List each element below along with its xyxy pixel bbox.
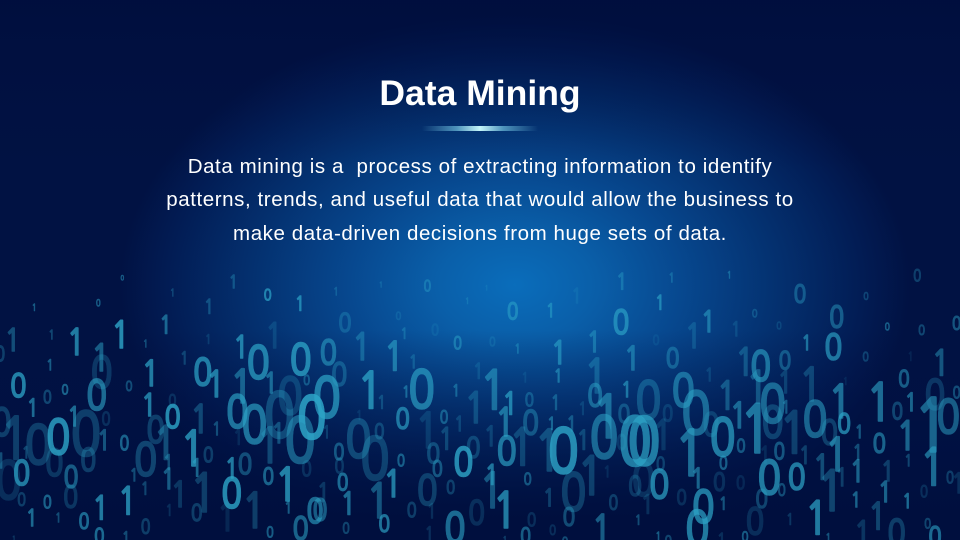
binary digit rain: 1	[275, 463, 299, 509]
binary digit rain: 1	[684, 319, 702, 354]
binary digit rain: 1	[190, 400, 210, 440]
binary digit rain: 0	[306, 494, 324, 529]
binary digit rain: 1	[912, 392, 951, 464]
binary digit rain: 1	[616, 271, 627, 294]
binary digit rain: 0	[432, 460, 443, 481]
binary digit rain: 1	[716, 377, 737, 416]
binary digit rain: 0	[787, 461, 806, 496]
binary digit rain: 1	[866, 379, 893, 430]
binary digit rain: 0	[226, 391, 249, 436]
binary digit rain: 0	[891, 402, 903, 424]
binary digit rain: 0	[616, 433, 627, 453]
binary digit rain: 1	[224, 455, 239, 483]
binary digit rain: 1	[26, 397, 39, 421]
binary digit rain: 0	[78, 512, 90, 533]
binary digit rain: 0	[374, 422, 385, 442]
binary digit rain: 1	[495, 403, 515, 443]
binary digit rain: 0	[652, 333, 660, 347]
binary digit rain: 0	[628, 473, 642, 501]
binary digit rain: 0	[761, 402, 784, 446]
binary digit rain: 1	[206, 367, 225, 404]
binary digit rain: 0	[453, 442, 474, 483]
binary digit rain: 0	[90, 352, 113, 396]
binary digit rain: 0	[656, 455, 666, 474]
binary digit rain: 0	[918, 323, 925, 337]
binary digit rain: 1	[4, 326, 21, 357]
binary digit rain: 0	[759, 379, 787, 432]
binary digit rain: 1	[241, 488, 267, 536]
binary digit rain: 0	[439, 409, 449, 427]
binary digit rain: 1	[635, 513, 642, 527]
binary digit rain: 1	[551, 394, 561, 413]
binary digit rain: 0	[426, 440, 441, 468]
binary digit rain: 1	[690, 465, 705, 493]
binary digit rain: 0	[755, 487, 768, 513]
binary digit rain: 0	[360, 431, 390, 490]
binary digit rain: 0	[221, 473, 243, 515]
binary digit rain: 1	[384, 338, 404, 377]
binary digit rain: 1	[828, 380, 852, 426]
binary digit rain: 1	[547, 416, 556, 433]
binary digit rain: 0	[301, 460, 312, 480]
binary digit rain: 1	[854, 422, 864, 442]
binary digit rain: 0	[524, 391, 534, 410]
binary digit rain: 1	[904, 390, 918, 416]
binary digit rain: 0	[63, 484, 79, 514]
binary digit rain: 1	[577, 452, 605, 504]
binary digit rain: 1	[322, 424, 331, 442]
binary digit rain: 1	[492, 487, 518, 536]
binary digit rain: 0	[121, 275, 124, 282]
binary digit rain: 0	[898, 369, 910, 392]
binary digit rain: 1	[427, 502, 437, 522]
binary digit rain: 1	[228, 272, 238, 292]
binary digit rain: 1	[366, 478, 391, 526]
binary digit rain: 1	[578, 401, 587, 418]
binary digit rain: 1	[379, 282, 383, 289]
binary digit rain: 0	[736, 473, 746, 493]
binary digit rain: 0	[337, 473, 349, 495]
binary digit rain: 1	[117, 484, 137, 521]
binary digit rain: 1	[295, 294, 305, 314]
binary digit rain: 1	[233, 333, 249, 364]
binary digit rain: 1	[835, 465, 848, 491]
binary digit rain: 1	[904, 454, 913, 470]
binary digit rain: 1	[473, 362, 484, 383]
binary digit rain: 1	[165, 504, 173, 519]
binary digit rain: 0	[802, 396, 828, 445]
binary digit rain: 0	[312, 370, 342, 427]
binary digit rain: 0	[820, 416, 838, 450]
binary digit rain: 1	[91, 342, 110, 378]
binary digit rain: 0	[61, 383, 69, 396]
binary digit rain: 0	[617, 411, 653, 477]
binary digit rain: 1	[554, 367, 563, 386]
binary digit rain: 1	[180, 350, 189, 368]
binary digit rain: 1	[180, 426, 205, 474]
binary digit rain: 0	[45, 447, 64, 483]
binary digit rain: 1	[479, 468, 504, 516]
binary digit rain: 1	[438, 425, 454, 455]
binary digit rain: 1	[55, 512, 62, 524]
binary digit rain: 0	[507, 302, 519, 324]
binary digit rain: 1	[731, 320, 741, 340]
binary digit rain: 0	[522, 406, 540, 440]
binary digit rain: 1	[586, 329, 602, 358]
binary digit rain: 1	[550, 336, 568, 370]
binary digit rain: 0	[431, 323, 439, 339]
binary digit rain: 1	[357, 367, 383, 418]
binary digit rain: 0	[750, 346, 772, 388]
binary digit rain: 1	[813, 451, 831, 485]
binary digit rain: 1	[153, 421, 177, 468]
binary digit rain: 1	[26, 508, 38, 531]
binary digit rain: 1	[204, 298, 214, 317]
binary digit rain: 1	[485, 285, 488, 292]
binary digit rain: 0	[885, 322, 890, 333]
binary digit rain: 0	[63, 464, 79, 494]
binary digit rain: 0	[560, 469, 587, 520]
binary digit rain: 0	[395, 310, 402, 322]
binary digit rain: 0	[468, 496, 486, 530]
binary digit rain: 0	[237, 451, 253, 480]
binary digit rain: 0	[549, 523, 556, 537]
binary digit rain: 0	[246, 341, 270, 387]
binary digit rain: 0	[423, 280, 431, 295]
binary digit rain: 1	[727, 271, 732, 280]
binary digit rain: 0	[333, 442, 345, 464]
binary digit rain: 1	[484, 461, 499, 489]
binary digit rain: 1	[189, 469, 217, 521]
binary digit rain: 0	[262, 467, 274, 489]
binary digit rain: 0	[793, 282, 807, 308]
binary digit rain: 0	[70, 405, 102, 466]
binary digit rain: 1	[263, 370, 278, 399]
binary digit rain: 1	[746, 367, 769, 411]
binary digit rain: 0	[338, 310, 352, 337]
binary digit rain: 1	[265, 319, 283, 354]
binary digit rain: 1	[652, 416, 673, 456]
binary digit rain: 0	[263, 288, 272, 304]
binary digit rain: 1	[479, 364, 508, 419]
binary digit rain: 1	[452, 384, 460, 400]
binary digit rain: 0	[446, 479, 455, 497]
binary digit rain: 1	[701, 308, 716, 338]
description text: Data mining is a process of extracting information to identify	[188, 155, 772, 178]
description text: patterns, trends, and useful data that would allow the business to	[166, 188, 794, 211]
binary digit rain: 1	[256, 423, 282, 471]
binary digit rain: 0	[702, 409, 720, 442]
binary digit rain: 1	[849, 458, 865, 488]
binary digit rain: 0	[164, 400, 181, 434]
binary digit rain: 0	[562, 505, 576, 531]
binary digit rain: 1	[402, 384, 410, 401]
binary digit rain: 1	[521, 371, 529, 385]
binary digit rain: 1	[576, 427, 590, 454]
binary digit rain: 0	[342, 522, 350, 537]
binary digit rain: 0	[589, 411, 619, 469]
binary digit rain: 1	[655, 294, 665, 313]
binary digit rain: 1	[284, 500, 293, 517]
binary digit rain: 0	[773, 442, 785, 464]
binary digit rain: 0	[829, 304, 845, 334]
binary digit rain: 0	[946, 470, 954, 487]
binary digit rain: 1	[233, 428, 244, 448]
binary digit rain: 0	[691, 486, 715, 531]
binary digit rain: 1	[143, 339, 148, 350]
binary digit rain: 0	[863, 291, 869, 302]
binary digit rain: 0	[752, 308, 758, 319]
binary digit rain: 1	[205, 333, 212, 346]
binary digit rain: 1	[592, 389, 623, 448]
binary digit rain: 1	[159, 313, 172, 338]
binary digit rain: 0	[713, 470, 726, 496]
binary digit rain: 1	[317, 480, 330, 506]
binary digit rain: 0	[24, 419, 53, 474]
binary digit rain: 1	[781, 399, 791, 417]
binary digit rain: 1	[908, 351, 914, 363]
binary digit rain: 1	[377, 394, 386, 412]
binary digit rain: 1	[161, 466, 176, 495]
binary digit rain: 1	[603, 464, 612, 481]
binary digit rain: 0	[862, 351, 869, 364]
binary digit rain: 0	[676, 488, 687, 508]
binary digit rain: 1	[508, 424, 535, 475]
binary digit rain: 1	[163, 453, 174, 473]
binary digit rain: 0	[608, 494, 618, 513]
binary digit rain: 1	[704, 366, 714, 385]
binary digit rain: 1	[514, 343, 521, 355]
binary digit rain: 0	[631, 458, 655, 504]
binary digit rain: 0	[43, 389, 52, 407]
binary digit rain: 0	[141, 518, 151, 537]
binary digit rain: 0	[736, 437, 746, 456]
binary digit rain: 1	[97, 427, 111, 455]
binary digit rain: 1	[454, 415, 465, 435]
binary digit rain: 1	[566, 415, 577, 435]
binary digit rain: 0	[416, 470, 438, 512]
binary digit rain: 1	[877, 479, 893, 508]
binary digit rain: 1	[0, 412, 30, 470]
binary digit rain: 0	[397, 454, 405, 470]
binary digit rain: 1	[533, 423, 563, 480]
binary digit rain: 1	[931, 347, 950, 382]
binary digit rain: 0	[303, 373, 310, 387]
binary digit rain: 0	[296, 390, 327, 449]
binary digit rain: 0	[395, 406, 410, 435]
binary digit rain: 1	[668, 272, 675, 285]
binary digit rain: 0	[920, 484, 928, 501]
binary digit rain: 0	[191, 503, 203, 526]
binary digit rain: 0	[408, 365, 436, 418]
binary digit rain: 0	[824, 331, 843, 366]
binary digit rain: 1	[852, 443, 863, 463]
binary digit rain: 1	[216, 498, 237, 538]
binary digit rain: 1	[778, 407, 808, 464]
binary digit rain: 1	[624, 343, 641, 376]
binary digit rain: 1	[465, 296, 470, 306]
binary digit rain: 1	[32, 303, 37, 313]
binary digit rain: 0	[523, 472, 532, 488]
binary digit rain: 1	[825, 433, 849, 479]
binary digit rain: 0	[80, 444, 97, 477]
binary digit rain: 0	[312, 497, 328, 527]
binary digit rain: 0	[757, 455, 782, 503]
binary digit rain: 1	[546, 302, 556, 321]
binary digit rain: 1	[48, 329, 55, 341]
binary digit rain: 1	[896, 416, 917, 457]
binary digit rain: 1	[777, 369, 793, 399]
binary digit rain: 1	[483, 423, 498, 451]
binary digit rain: 1	[230, 365, 254, 411]
binary digit rain: 1	[816, 464, 846, 520]
binary digit rain: 0	[101, 411, 111, 429]
binary digit rain: 0	[635, 376, 662, 428]
binary digit rain: 1	[415, 408, 440, 456]
binary digit rain: 1	[902, 491, 913, 512]
binary digit rain: 1	[170, 288, 175, 299]
binary digit rain: 0	[466, 435, 481, 464]
binary digit rain: 0	[627, 411, 661, 477]
binary digit rain: 1	[502, 389, 518, 420]
binary digit rain: 1	[851, 490, 861, 511]
binary digit rain: 0	[837, 410, 851, 438]
binary digit rain: 0	[665, 345, 680, 373]
binary digit rain: 0	[119, 435, 129, 454]
binary digit rain: 1	[801, 334, 812, 354]
binary digit rain: 0	[10, 370, 27, 403]
binary digit rain: 1	[212, 421, 221, 439]
binary digit rain: 1	[356, 409, 363, 422]
binary digit rain: 1	[621, 380, 632, 402]
binary digit rain: 0	[13, 457, 31, 491]
binary digit rain: 0	[289, 339, 312, 383]
binary digit rain: 0	[46, 414, 71, 463]
binary digit rain: 1	[759, 445, 771, 468]
binary digit rain: 0	[778, 349, 792, 374]
binary digit rain: 0	[406, 501, 417, 521]
binary digit rain: 1	[352, 331, 371, 367]
binary digit rain: 0	[134, 438, 158, 484]
binary digit rain: 1	[66, 326, 86, 362]
binary digit rain: 0	[489, 336, 496, 349]
binary digit rain: 0	[547, 421, 580, 484]
binary digit rain: 1	[67, 404, 81, 431]
binary digit rain: 1	[140, 481, 150, 498]
binary digit rain: 0	[284, 411, 316, 473]
binary digit rain: 0	[776, 321, 782, 331]
binary digit rain: 1	[919, 444, 946, 495]
title: Data Mining	[379, 73, 581, 113]
binary digit rain: 0	[872, 431, 886, 458]
binary digit rain: 1	[584, 354, 608, 401]
binary digit rain: 1	[92, 492, 109, 525]
binary digit rain: 1	[799, 363, 823, 409]
binary digit rain: 1	[340, 489, 357, 520]
binary digit rain: 0	[777, 483, 786, 499]
binary digit rain: 0	[662, 403, 673, 426]
binary digit rain: 1	[22, 445, 30, 462]
binary digit rain: 0	[719, 455, 728, 473]
binary digit rain: 0	[924, 375, 946, 416]
binary digit rain: 0	[649, 465, 670, 505]
binary digit rain: 1	[729, 399, 748, 435]
binary digit rain: 1	[868, 500, 887, 536]
binary digit rain: 0	[378, 513, 390, 537]
binary digit rain: 1	[400, 327, 408, 342]
binary digit rain: 0	[168, 394, 177, 410]
binary digit rain: 1	[543, 487, 555, 511]
binary digit rain: 0	[496, 431, 517, 472]
binary digit rain: 1	[640, 491, 654, 518]
binary digit rain: 1	[170, 478, 189, 514]
description text	[166, 155, 794, 245]
binary digit rain: 0	[319, 336, 337, 370]
binary digit rain: 0	[671, 369, 695, 415]
binary digit rain: 1	[141, 358, 160, 393]
description text: make data-driven decisions from huge sets of data.	[233, 222, 727, 245]
binary digit rain: 0	[527, 511, 537, 530]
binary digit rain: 0	[612, 305, 630, 340]
binary digit rain: 1	[843, 376, 848, 387]
binary digit rain: 1	[271, 420, 286, 448]
binary digit rain: 1	[735, 345, 755, 382]
binary digit rain: 1	[464, 388, 486, 431]
binary digit rain: 0	[241, 401, 268, 453]
binary digit rain: 1	[46, 359, 54, 374]
binary digit rain: 0	[680, 386, 712, 445]
binary digit rain: 1	[383, 467, 402, 504]
binary digit rain: 0	[277, 373, 303, 424]
binary digit rain: 0	[587, 382, 603, 413]
binary digit rain: 0	[331, 358, 348, 391]
binary digit rain: 0	[125, 379, 133, 393]
binary digit rain: 1	[190, 457, 203, 481]
binary digit rain: 0	[17, 492, 26, 509]
binary digit rain: 0	[86, 375, 108, 417]
binary digit rain: 1	[799, 445, 811, 468]
binary digit rain: 0	[709, 414, 736, 465]
binary digit rain: 1	[129, 468, 139, 485]
binary digit rain: 1	[719, 496, 728, 513]
binary digit rain: 1	[571, 286, 582, 307]
binary digit rain: 0	[43, 494, 52, 512]
binary digit rain: 1	[786, 513, 794, 528]
binary digit rain: 0	[913, 269, 922, 285]
binary digit rain: 1	[111, 318, 130, 355]
binary digit rain: 0	[924, 517, 931, 530]
binary digit rain: 1	[141, 391, 157, 422]
binary digit rain: 0	[345, 415, 372, 467]
binary digit rain: 0	[334, 457, 344, 477]
binary digit rain: 0	[203, 444, 214, 466]
binary digit rain: 0	[263, 386, 296, 448]
binary digit rain: 1	[333, 286, 339, 298]
binary digit rain: 1	[674, 424, 706, 486]
binary digit rain: 0	[96, 299, 101, 309]
binary digit rain: 0	[146, 413, 165, 450]
binary digit rain: 1	[739, 399, 773, 464]
binary digit rain: 1	[408, 352, 418, 372]
binary digit rain: 0	[193, 355, 213, 392]
binary digit rain: 0	[453, 335, 462, 353]
glowing divider under title	[422, 126, 538, 131]
binary digit rain: 1	[880, 458, 895, 486]
binary digit rain: 0	[617, 402, 631, 428]
